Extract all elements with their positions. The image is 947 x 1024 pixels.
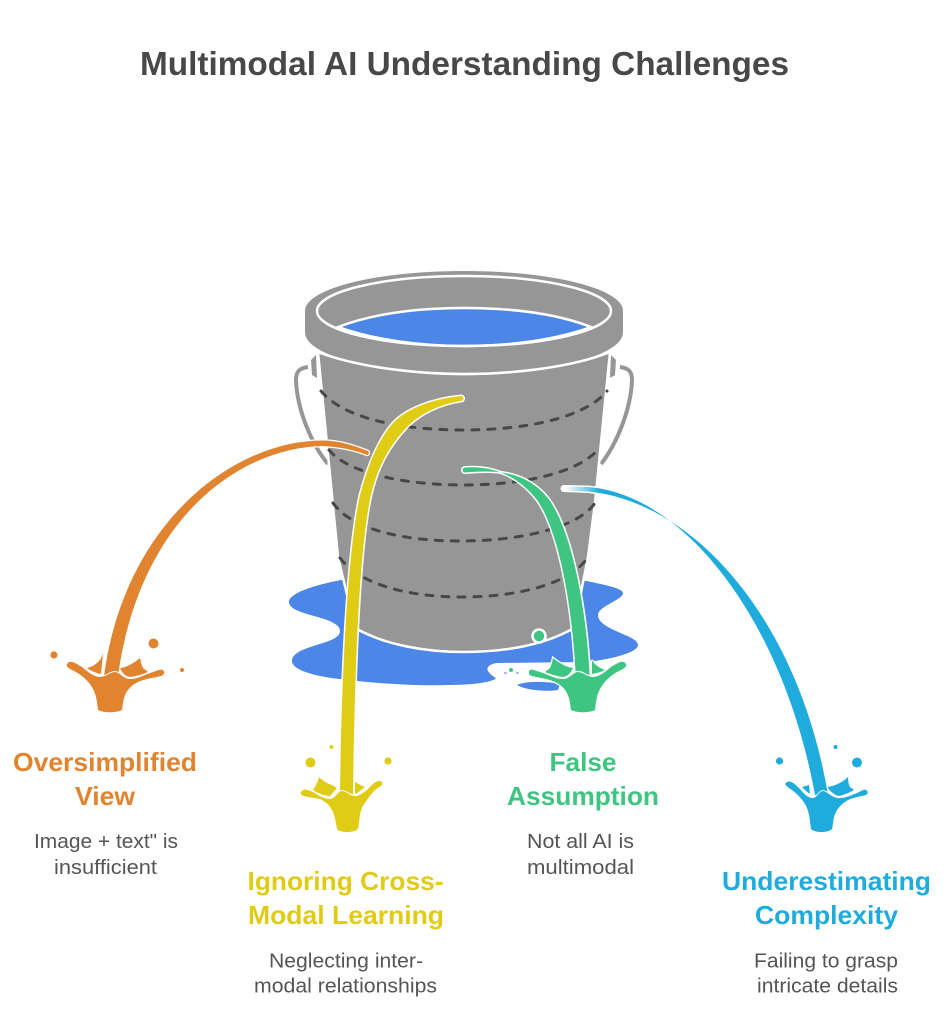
description: insufficient <box>54 856 157 879</box>
label: underestimating complexity <box>722 866 931 998</box>
rim inner ellipse <box>317 276 611 346</box>
description <box>527 830 634 879</box>
spill gap <box>487 662 600 690</box>
small puddle <box>517 682 560 691</box>
description <box>34 830 178 879</box>
water surface <box>338 308 591 346</box>
label: false assumption: Assumption <box>507 781 659 811</box>
label: ignoring cross-modal learning: Modal Learning <box>248 900 444 930</box>
flow: blue stream and splash <box>562 486 868 832</box>
label: underestimating complexity: Underestimating <box>722 866 931 896</box>
flow: yellow stream and splash <box>301 396 464 832</box>
flow: orange stream and splash <box>50 440 369 712</box>
label: underestimating complexity: Complexity <box>755 900 899 930</box>
bucket body <box>318 352 610 652</box>
title: Multimodal AI Understanding Challenges <box>140 45 789 82</box>
flow: green stream and splash <box>462 467 626 712</box>
description: intricate details <box>757 974 898 998</box>
bucket rim <box>305 271 623 373</box>
droplet and ripples <box>504 668 519 673</box>
droplets <box>306 745 392 768</box>
bucket handles <box>296 367 632 464</box>
droplets <box>50 638 184 672</box>
label: ignoring cross-modal learning: Ignoring Cross- <box>248 866 444 896</box>
icon: leaking bucket <box>289 271 638 691</box>
description: modal relationships <box>254 974 437 998</box>
description <box>254 950 437 998</box>
description: Neglecting inter- <box>269 950 423 972</box>
leak hole drop <box>532 630 546 642</box>
puddle <box>289 580 638 685</box>
rim lower highlight <box>318 352 610 374</box>
description <box>754 950 898 998</box>
description: multimodal <box>527 856 634 879</box>
description: Failing to grasp <box>754 950 898 972</box>
label: oversimplified view <box>13 747 197 879</box>
description: Not all AI is <box>527 830 634 853</box>
label: oversimplified view: View <box>75 781 136 811</box>
label: ignoring cross-modal learning <box>248 866 444 998</box>
description: Image + text" is <box>34 830 178 853</box>
bucket band dashes <box>321 391 607 597</box>
label: false assumption: False <box>550 747 616 777</box>
label: oversimplified view: Oversimplified <box>13 747 197 777</box>
label: false assumption <box>507 747 659 879</box>
droplets <box>776 745 862 768</box>
